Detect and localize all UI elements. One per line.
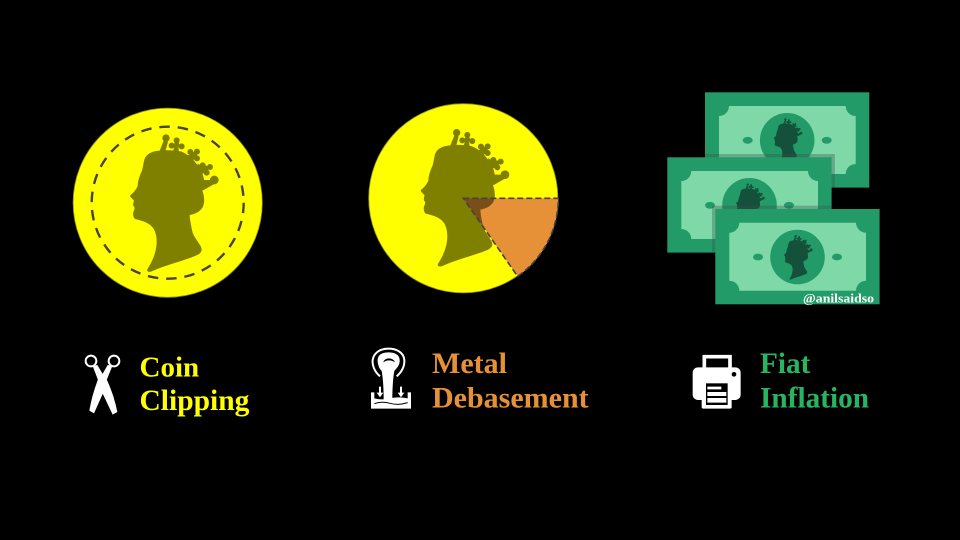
banknote stack [667,92,880,306]
banknote: back [705,92,869,188]
icon: crucible pouring into mould [371,349,411,409]
label: coin clipping: Clipping [140,385,250,417]
label: coin clipping: Coin [140,352,199,384]
icon: printer [693,357,741,409]
banknote: front [715,209,880,304]
label: fiat inflation: Inflation [760,382,869,414]
coin: clipped coin [73,108,262,297]
queen silhouette [130,134,219,272]
label: metal debasement: Metal [432,347,507,380]
label: fiat inflation: Fiat [760,348,811,380]
coin: debased coin [369,104,558,293]
watermark: @anilsaidso [803,292,874,306]
banknote shadow: middle [705,154,835,188]
queen silhouette [421,129,509,267]
banknote: middle [667,157,832,253]
icon: scissors [86,356,119,415]
dashed clipping line [92,127,244,279]
banknote shadow: front [712,206,832,252]
debased wedge [462,198,560,277]
label: metal debasement: Debasement [432,382,589,414]
